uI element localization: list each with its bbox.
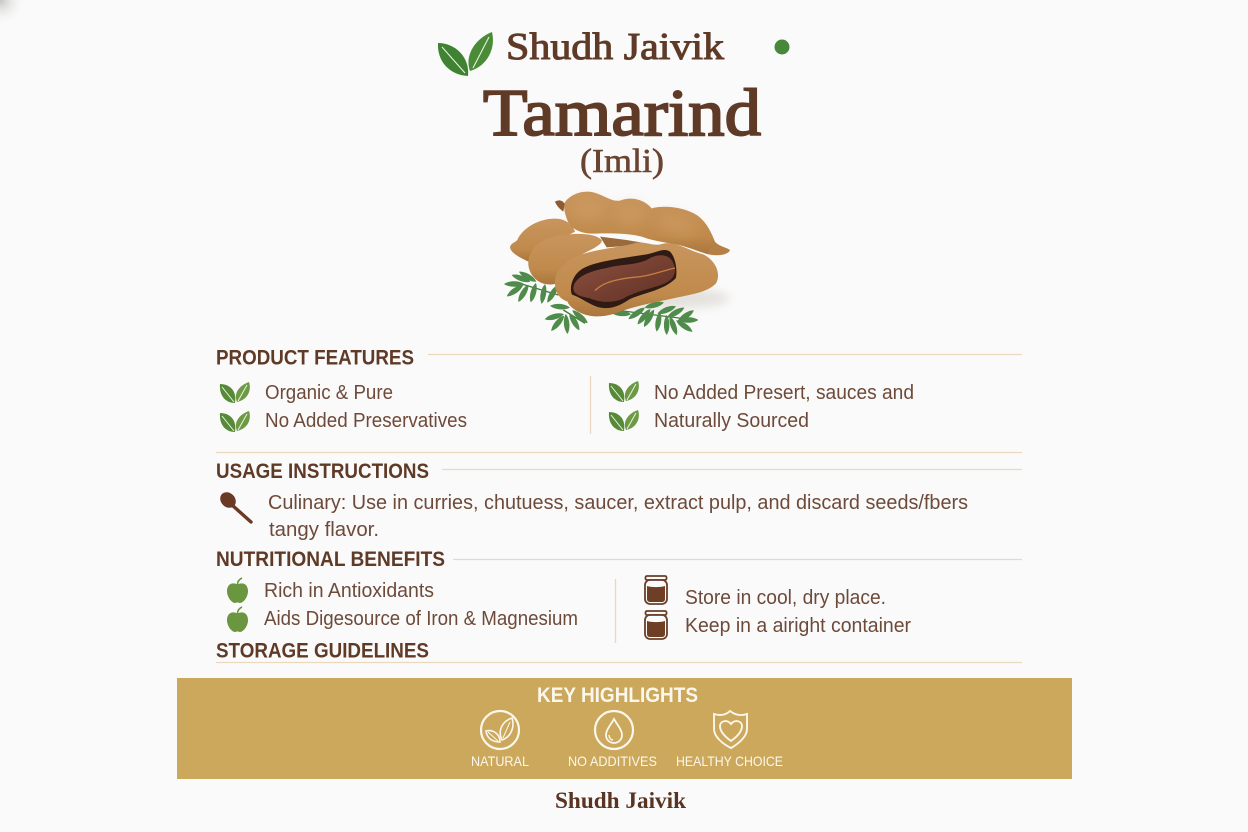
green dot [774, 40, 790, 54]
pod interior [571, 250, 676, 308]
usage text: Culinary: Use in curries, chutuess, saucer, extract pulp, and discard seeds/fbers [268, 492, 968, 514]
band background [177, 678, 1072, 779]
icon: leaves [609, 381, 639, 402]
heading: STORAGE GUIDELINES [216, 640, 429, 662]
icon: apple [227, 578, 248, 603]
storage text: Store in cool, dry place. [685, 587, 886, 609]
pod: left [510, 219, 575, 262]
pod: dark gap [600, 237, 650, 247]
panel: usage instructions [216, 460, 1022, 541]
icon: natural [481, 711, 519, 749]
pod: middle [528, 234, 602, 284]
pulp fibre [595, 268, 675, 291]
brand name: Shudh Jaivik [506, 26, 724, 68]
panel: key highlights [177, 678, 1072, 779]
label: HEALTHY CHOICE [676, 753, 783, 769]
icon: jar [645, 611, 667, 639]
icon: brand leaves [438, 32, 493, 76]
heading: NUTRITIONAL BENEFITS [216, 548, 445, 571]
subtitle: (Imli) [580, 143, 664, 180]
pod highlights [572, 200, 698, 239]
footer brand: Shudh Jaivik [555, 788, 686, 813]
feature text: Organic & Pure [265, 382, 393, 404]
bottom sprig [544, 303, 589, 334]
right sprig [611, 300, 698, 336]
icon: healthy choice [714, 711, 747, 748]
heading: PRODUCT FEATURES [216, 346, 414, 370]
heading: KEY HIGHLIGHTS [537, 684, 698, 707]
illustration: tamarind pods [504, 192, 730, 336]
icon: spoon [217, 489, 251, 522]
left sprig [504, 269, 560, 304]
heading: USAGE INSTRUCTIONS [216, 460, 429, 483]
usage text continued: tangy flavor. [269, 519, 379, 541]
pod: top [564, 192, 715, 254]
title: Tamarind [483, 76, 761, 150]
icon: leaves [220, 382, 250, 403]
icon: jar [645, 576, 667, 604]
feature text: No Added Presert, sauces and [654, 382, 914, 404]
pod tip [707, 240, 730, 255]
feature text: Naturally Sourced [654, 410, 809, 432]
storage text: Keep in a airight container [685, 615, 911, 637]
feature text: No Added Preservatives [265, 410, 467, 432]
icon: leaves [609, 410, 639, 431]
shadow [603, 288, 730, 309]
panel: storage [216, 576, 1022, 662]
pod stem [555, 200, 565, 212]
brand header [438, 26, 724, 76]
benefit text: Aids Digesource of Iron & Magnesium [264, 608, 578, 630]
label: NATURAL [471, 753, 529, 769]
leaves [504, 269, 698, 336]
icon: no additives [595, 711, 633, 749]
icon: leaves [220, 411, 250, 432]
benefit text: Rich in Antioxidants [264, 580, 434, 602]
pod: opened front [555, 243, 718, 316]
tamarind pulp [573, 255, 675, 302]
panel: nutritional benefits [216, 548, 1022, 632]
panel: product features [216, 346, 1022, 434]
icon: apple [227, 607, 248, 632]
label: NO ADDITIVES [568, 753, 657, 769]
